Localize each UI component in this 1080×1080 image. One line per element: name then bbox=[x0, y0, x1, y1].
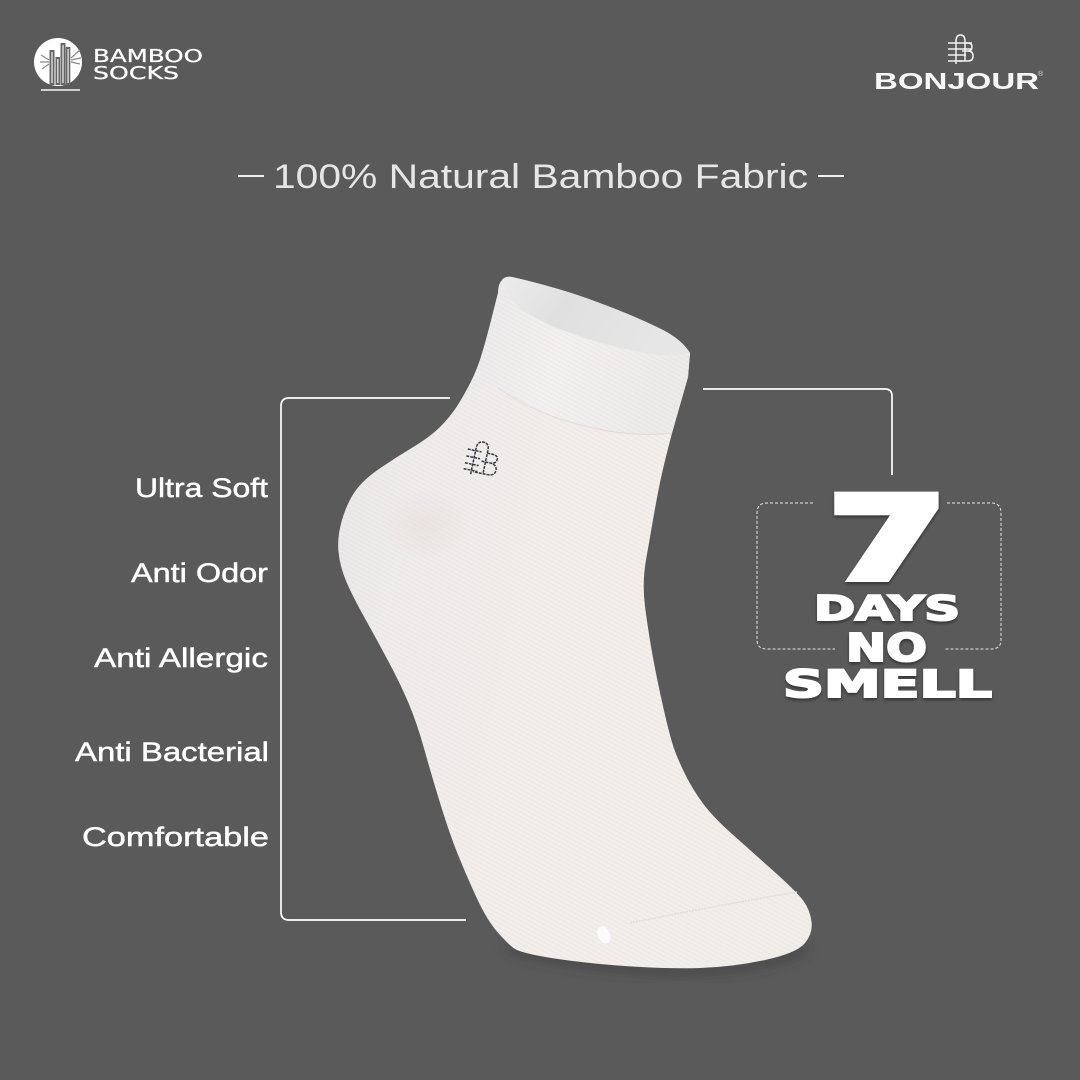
cuff opening bbox=[502, 277, 690, 355]
title text: 100% Natural Bamboo Fabric bbox=[273, 158, 808, 196]
word: days: DAYS bbox=[814, 589, 960, 629]
feature list bbox=[75, 473, 269, 852]
icon: bamboo circle bbox=[34, 38, 82, 91]
bracket: seven days bbox=[703, 389, 892, 475]
toe seam bbox=[630, 892, 797, 923]
sock cuff bbox=[463, 277, 690, 434]
logo text: bamboo socks: SOCKS bbox=[93, 64, 179, 84]
badge: 7 days no smell bbox=[757, 473, 1001, 706]
logo text: bamboo socks: BAMBOO bbox=[93, 47, 203, 67]
heel shading bbox=[380, 490, 470, 560]
toe nub bbox=[595, 924, 613, 946]
feature: anti bacterial: Anti Bacterial bbox=[75, 737, 269, 767]
title dash right bbox=[818, 175, 844, 177]
word: no: NO bbox=[846, 626, 927, 670]
sock image bbox=[338, 277, 812, 968]
cuff seam bbox=[498, 388, 672, 434]
sock body bbox=[338, 293, 812, 968]
logo: bamboo socks bbox=[34, 38, 203, 91]
sock shadow bbox=[507, 947, 806, 971]
bracket: features bbox=[281, 398, 466, 920]
feature: anti allergic: Anti Allergic bbox=[94, 643, 268, 673]
feature: ultra soft: Ultra Soft bbox=[135, 473, 269, 503]
dashed frame bbox=[757, 503, 1001, 649]
logo text: bamboo socks bbox=[93, 47, 203, 84]
feature: comfortable: Comfortable bbox=[82, 822, 269, 852]
logo: bonjour bbox=[874, 35, 1044, 94]
icon: bonjour monogram bbox=[948, 35, 973, 64]
number 7: 7 bbox=[829, 473, 946, 605]
wordmark: bonjour: BONJOUR bbox=[874, 68, 1040, 94]
icon: sock monogram bbox=[463, 439, 501, 479]
word: smell: SMELL bbox=[783, 663, 992, 706]
title dash left bbox=[238, 175, 264, 177]
registered mark: ® bbox=[1038, 70, 1044, 78]
feature: anti odor: Anti Odor bbox=[131, 558, 268, 588]
